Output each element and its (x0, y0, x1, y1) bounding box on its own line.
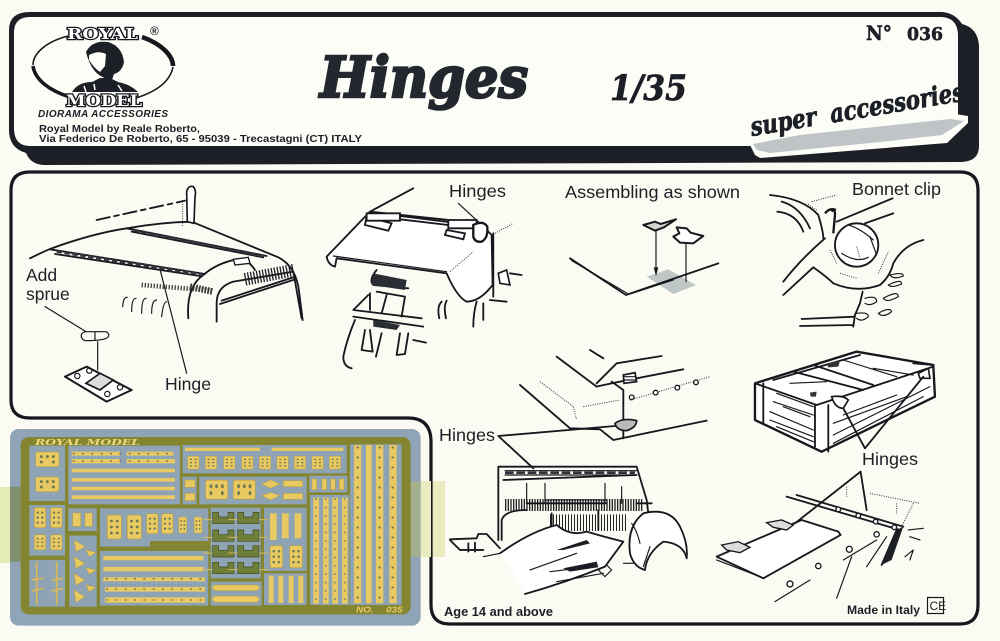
fret brass frame (21, 437, 411, 614)
sprue leader (45, 307, 86, 332)
logo name ROYAL: ROYAL (67, 25, 139, 43)
icon: sprue (81, 332, 109, 370)
left hand (483, 525, 623, 594)
product number (866, 21, 943, 45)
title: Hinges (318, 45, 528, 111)
illustration: hands fitting hinge (450, 467, 687, 594)
product number: 036 (907, 24, 943, 45)
strip holes (358, 447, 393, 603)
label: assembling: Assembling as shown (565, 182, 740, 202)
logo soldier (72, 42, 138, 92)
hinge parts (32, 452, 344, 605)
panel: header banner (9, 12, 979, 165)
registered mark: ® (150, 24, 159, 38)
leader lines (498, 426, 615, 468)
tape strips (0, 481, 431, 563)
scale: 1/35 (610, 68, 687, 109)
CE mark: CE (930, 599, 946, 613)
brand text on fret: ROYAL MODEL (33, 437, 141, 447)
illustration: ammo crate (755, 352, 935, 452)
logo (33, 24, 173, 110)
fret number: NO. 035 (356, 604, 403, 614)
tape strip behind instructions (431, 481, 445, 557)
fret backing (10, 429, 421, 626)
address (39, 124, 362, 145)
label: bonnet clip: Bonnet clip (852, 179, 941, 199)
label: sprue: sprue (26, 284, 70, 304)
header frame and shadow (9, 12, 979, 165)
dark clip parts (203, 512, 268, 574)
icon: hinge plate (65, 367, 132, 402)
label: add: Add (26, 265, 57, 285)
arrows (654, 231, 686, 282)
photo: photo-etched fret (10, 429, 421, 626)
illustration: bonnet clip (770, 195, 923, 327)
logo oval (33, 36, 173, 98)
address: Royal Model by Reale Roberto, (39, 124, 200, 135)
age note: Age 14 and above (444, 605, 553, 619)
origin note: Made in Italy (847, 603, 920, 617)
panel: instructions frame (11, 172, 978, 624)
text labels (26, 179, 946, 619)
leader lines (843, 377, 923, 448)
label: hinge: Hinge (165, 374, 211, 394)
illustration: assembling detail (570, 219, 718, 295)
address: Via Federico De Roberto, 65 - 95039 - Trecastagni (CT) ITALY (39, 134, 362, 145)
vertical strips (269, 445, 397, 604)
header white interior (14, 17, 958, 146)
brush stroke (750, 114, 968, 158)
illustration: panel on hull (717, 472, 923, 602)
label: hinges crate: Hinges (862, 449, 918, 469)
logo name MODEL: MODEL (66, 91, 142, 110)
label: hinges lower: Hinges (439, 425, 495, 445)
illustration: hinged hatch (327, 188, 522, 368)
label: hinges top: Hinges (449, 181, 506, 201)
tagline: DIORAMA ACCESSORIES (38, 109, 168, 120)
right hand (623, 512, 687, 570)
product number: N° (866, 21, 892, 45)
illustration: tank rear with hinges (498, 350, 710, 468)
tape over left of backing (10, 487, 30, 562)
illustration: truck hood with hinge (30, 186, 303, 402)
fret cells (29, 444, 402, 607)
long hinge strips top (72, 448, 343, 603)
